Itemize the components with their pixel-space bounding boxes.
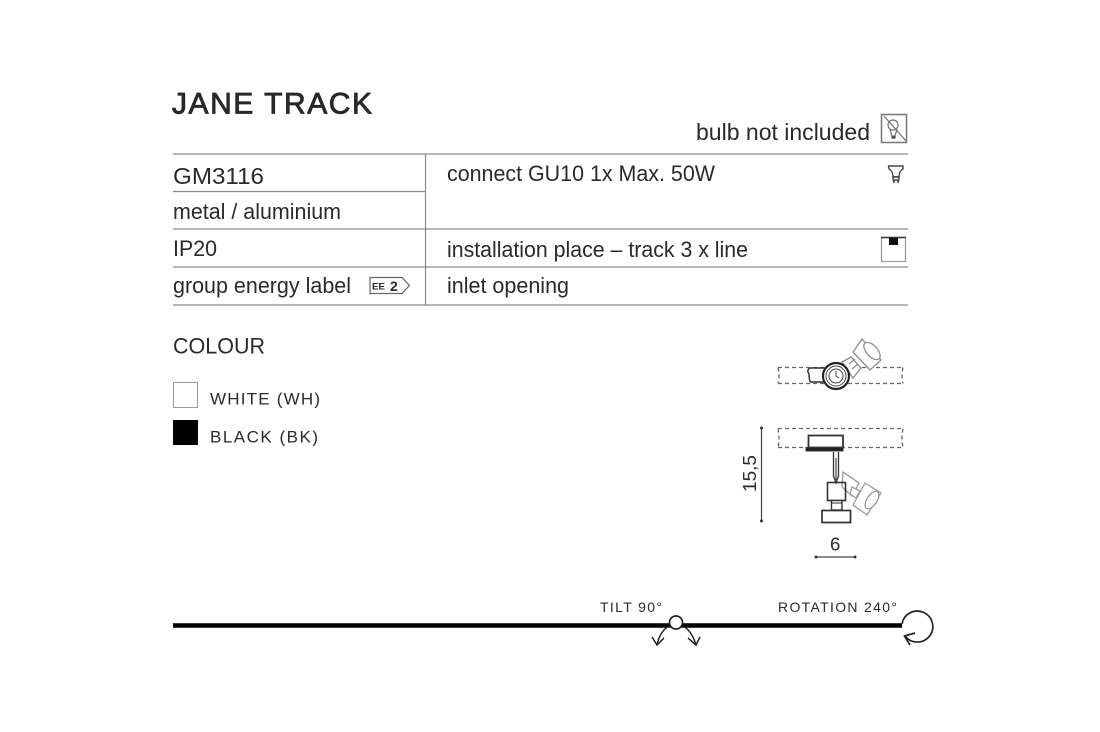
left column text: group energy label [173, 273, 351, 298]
right column text [447, 161, 748, 298]
left column text [173, 163, 351, 298]
right column text: installation place – track 3 x line [447, 237, 748, 262]
dimension: height 15,5 [739, 426, 763, 522]
technical drawing: side view [778, 428, 904, 522]
rotation axis line [173, 623, 902, 628]
left column text: IP20 [173, 236, 217, 261]
icon: GU10 bulb [888, 166, 903, 183]
right column text: inlet opening [447, 273, 569, 298]
tilt label: TILT 90° [600, 599, 662, 615]
specification table [173, 154, 908, 305]
technical drawing: top view [778, 339, 904, 389]
colour heading: COLOUR [173, 334, 265, 358]
right column text: connect GU10 1x Max. 50W [447, 161, 715, 186]
dimension: width 6: 6 [830, 534, 840, 554]
left column text: GM3116 [173, 163, 264, 189]
swatch: black: BLACK (BK) [210, 428, 318, 446]
icon: track installation place [881, 238, 906, 262]
swatch: white [174, 382, 320, 408]
title: JANE TRACK [172, 88, 372, 120]
icon: tilt arrows [652, 616, 700, 645]
swatch: white: WHITE (WH) [210, 390, 320, 408]
swatch: black [173, 420, 318, 446]
dimension: width 6 [814, 534, 856, 558]
icon: rotation arrow [902, 611, 933, 645]
icon: energy label: EE [372, 282, 385, 292]
dimension: height 15,5: 15,5 [739, 455, 760, 492]
icon: bulb not included [882, 114, 906, 142]
icon: energy label: 2 [390, 278, 398, 294]
rotation label: ROTATION 240° [778, 599, 897, 615]
left column text: metal / aluminium [173, 199, 341, 224]
bulb not included note: bulb not included [696, 119, 870, 145]
icon: energy label [370, 278, 410, 294]
